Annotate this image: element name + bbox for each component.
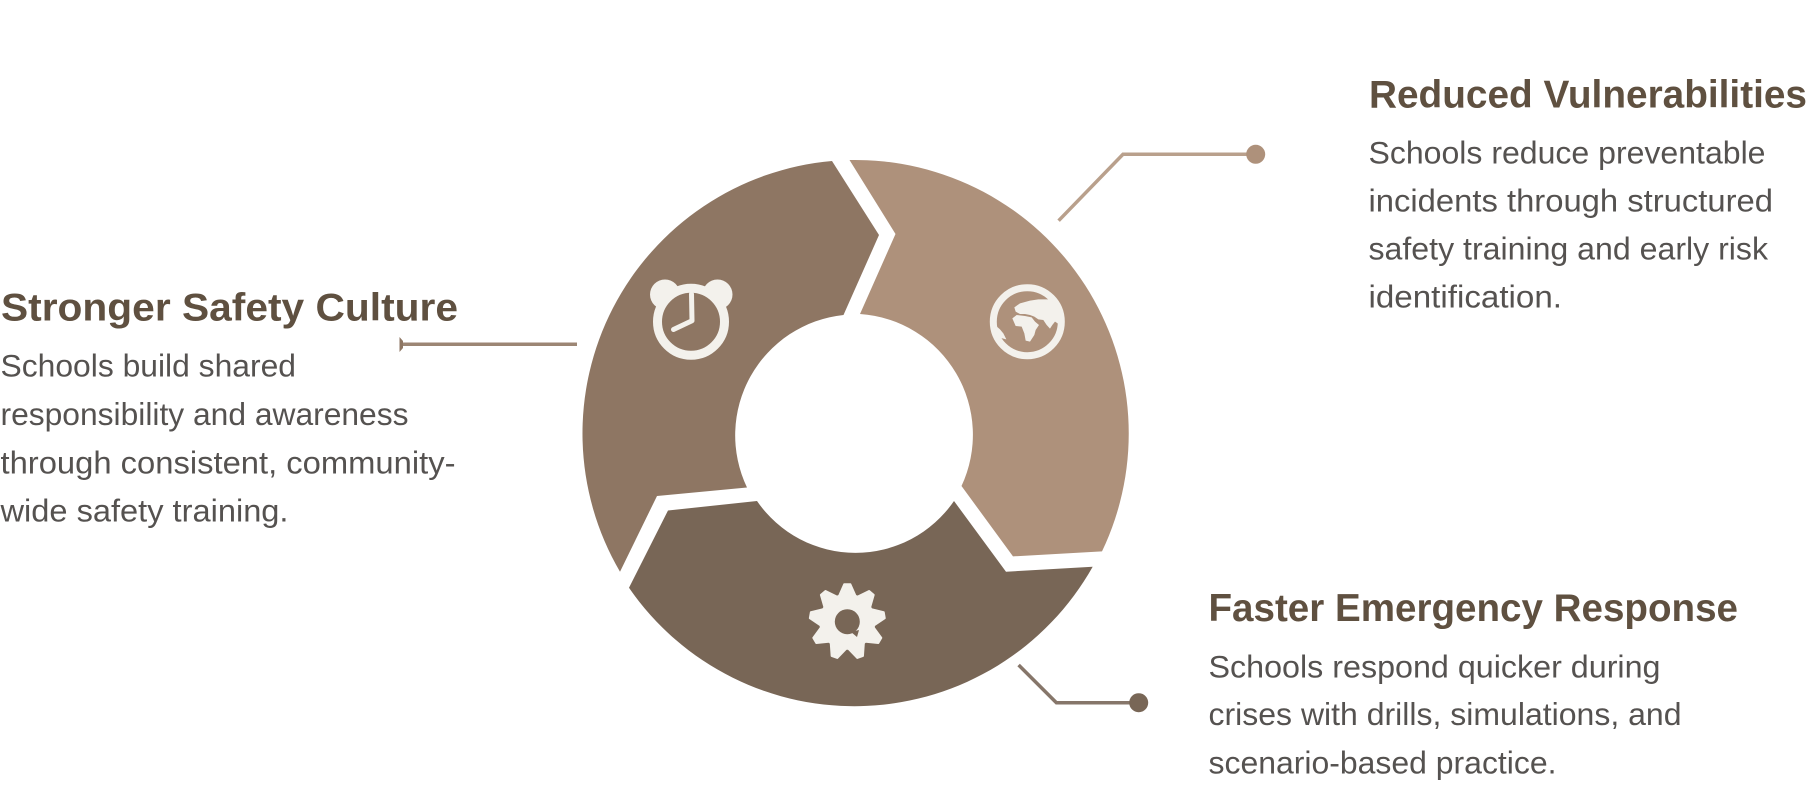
description: Schools reduce preventable [1368,134,1766,170]
description [0,348,456,529]
icon: globe [993,288,1063,356]
description [1208,648,1682,780]
text block: faster emergency response [1208,587,1738,780]
text block: reduced vulnerabilities [1368,73,1807,314]
segment: faster emergency response [629,501,1093,706]
segment: stronger safety culture [582,161,879,572]
description: Schools respond quicker during [1208,648,1660,684]
description: identification. [1368,278,1562,314]
description: responsibility and awareness [0,396,409,432]
heading: Reduced Vulnerabilities [1369,73,1807,116]
description: Schools build shared [0,348,296,384]
description: scenario-based practice. [1208,744,1556,780]
heading: Faster Emergency Response [1208,587,1738,630]
connector: stronger safety culture [400,337,577,352]
segment: reduced vulnerabilities [850,160,1129,556]
description: crises with drills, simulations, and [1208,696,1682,732]
description: wide safety training. [0,493,289,529]
text block: stronger safety culture [0,287,458,529]
cycle diagram [582,160,1129,706]
connector: faster emergency response [1019,665,1148,712]
description: safety training and early risk [1368,230,1768,266]
icon: alarm clock [650,280,732,355]
connector: reduced vulnerabilities [1059,145,1265,221]
icon: gear [809,584,886,660]
description: through consistent, community- [0,444,456,480]
description: incidents through structured [1368,183,1773,219]
heading: Stronger Safety Culture [1,287,458,330]
description [1368,134,1773,314]
